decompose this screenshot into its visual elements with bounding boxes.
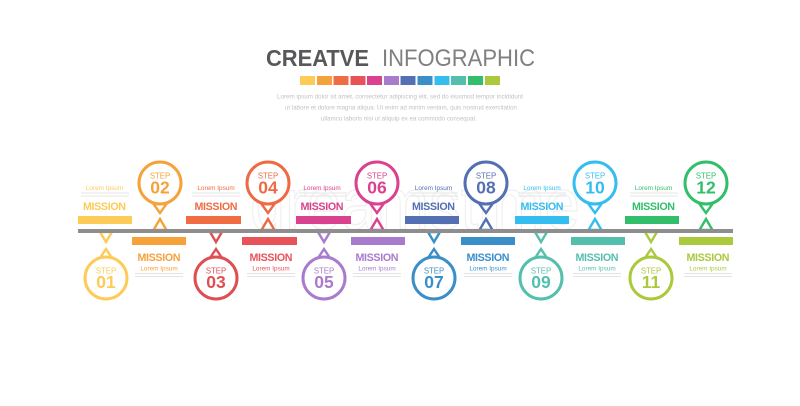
step 08: Lorem Ipsum	[469, 266, 507, 272]
step 06	[351, 162, 405, 276]
step 05: STEP	[314, 266, 334, 275]
step 03: Lorem Ipsum	[197, 185, 235, 192]
step 01: 01	[96, 272, 116, 292]
watermark: dreamstime	[250, 165, 580, 245]
step 11: MISSION	[632, 201, 675, 213]
step 12: MISSION	[686, 252, 730, 264]
step 07: 07	[424, 272, 444, 292]
step 04	[242, 162, 297, 276]
colour swatch strip	[300, 76, 500, 85]
step 11: 11	[642, 272, 661, 292]
step 11: Lorem Ipsum	[635, 185, 672, 192]
step 02: 02	[150, 178, 170, 198]
step 10: 10	[585, 178, 605, 198]
step 03: STEP	[206, 266, 226, 275]
step 08: MISSION	[466, 252, 510, 264]
intro text block: ullamco laboris nisi ut aliquip ex ea commodo consequat.	[321, 116, 477, 122]
step 08	[461, 162, 515, 276]
step 10: Lorem Ipsum	[578, 266, 616, 272]
step 04: STEP	[258, 172, 278, 180]
title	[266, 45, 535, 72]
step 02: MISSION	[138, 252, 180, 264]
step 06: STEP	[367, 172, 387, 180]
step 01	[78, 185, 132, 299]
step 07: MISSION	[412, 201, 455, 213]
step 10	[571, 162, 625, 276]
step 09: Lorem Ipsum	[523, 185, 561, 192]
step 02: STEP	[150, 172, 170, 180]
step 12: 12	[696, 178, 716, 198]
step 02: Lorem Ipsum	[140, 266, 178, 272]
step 03	[186, 185, 241, 299]
step 08: 08	[476, 178, 496, 198]
step 02	[132, 162, 186, 276]
step 05: Lorem Ipsum	[303, 185, 341, 192]
step 10: MISSION	[576, 252, 618, 264]
step 01: STEP	[96, 266, 116, 275]
step 09: 09	[531, 272, 551, 292]
timeline bar	[78, 229, 733, 233]
step 04: 04	[258, 178, 278, 198]
step 11: STEP	[641, 266, 661, 275]
intro text block: Lorem ipsum dolor sit amet, consectetur adipiscing elit, sed do eiusmod tempor incididunt	[277, 94, 523, 100]
step 01: MISSION	[83, 201, 126, 213]
step 07: Lorem Ipsum	[415, 185, 452, 192]
step 09: MISSION	[520, 201, 564, 213]
step 12: Lorem Ipsum	[689, 266, 727, 272]
step 12: STEP	[696, 172, 716, 180]
step 07: STEP	[424, 266, 444, 275]
step 01: Lorem Ipsum	[86, 185, 123, 192]
step 07	[405, 185, 459, 299]
step 10: STEP	[585, 172, 605, 180]
step 05: 05	[314, 272, 334, 292]
title: CREATVE	[266, 45, 369, 71]
step 09: STEP	[531, 266, 551, 275]
step 09	[515, 185, 569, 299]
title: INFOGRAPHIC	[382, 45, 535, 72]
step 05	[296, 185, 351, 299]
step 04: Lorem Ipsum	[252, 266, 290, 272]
step 08: STEP	[476, 172, 496, 180]
step 06: 06	[367, 178, 387, 198]
step 11	[625, 185, 679, 299]
intro text block: ut labore et dolore magna aliqua. Ut enim ad minim veniam, quis nostrud exercitation	[285, 104, 517, 112]
step 06: Lorem Ipsum	[358, 266, 396, 272]
intro text block	[277, 94, 523, 122]
step 06: MISSION	[356, 252, 398, 264]
step 05: MISSION	[300, 201, 344, 213]
step 03: MISSION	[194, 201, 238, 213]
step 04: MISSION	[250, 252, 292, 264]
step 03: 03	[206, 272, 226, 292]
step 12	[679, 162, 733, 276]
